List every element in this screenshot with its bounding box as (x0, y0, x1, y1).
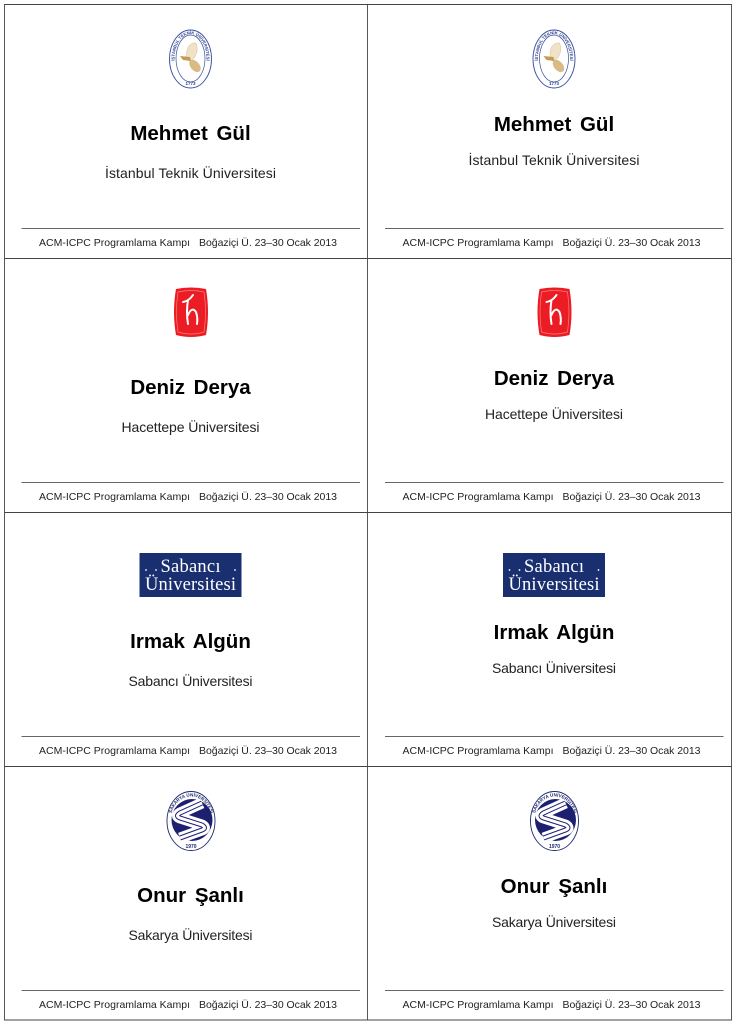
footer: Boğaziçi Ü. 23–30 Ocak 2013 (562, 745, 701, 757)
footer (22, 228, 360, 249)
footer (22, 990, 360, 1011)
footer: Boğaziçi Ü. 23–30 Ocak 2013 (562, 999, 701, 1011)
footer: ACM-ICPC Programlama Kampı (402, 999, 554, 1011)
card: Onur Şanlı, right (385, 791, 724, 1011)
logo: Sabancı Üniversitesi: Sabancı (160, 557, 220, 577)
name: Irmak Algün (130, 630, 251, 653)
footer (385, 482, 724, 503)
footer (385, 990, 724, 1011)
logo: Hacettepe Üniversitesi (538, 288, 572, 337)
footer: Boğaziçi Ü. 23–30 Ocak 2013 (199, 491, 337, 503)
card: Irmak Algün, right (385, 553, 724, 757)
logo: Sakarya Üniversitesi: SAKARYA ÜNİVERSİTESİ (168, 792, 214, 813)
footer: ACM-ICPC Programlama Kampı (39, 999, 190, 1011)
footer: ACM-ICPC Programlama Kampı (39, 745, 190, 757)
card: Deniz Derya, right (385, 288, 724, 503)
logo: İstanbul Teknik Üniversitesi (532, 30, 576, 88)
footer: ACM-ICPC Programlama Kampı (39, 237, 190, 249)
footer: ACM-ICPC Programlama Kampı (402, 491, 554, 503)
name: Deniz Derya (130, 376, 251, 399)
logo: Sabancı Üniversitesi: Üniversitesi (508, 574, 600, 595)
logo: İstanbul Teknik Üniversitesi (169, 30, 212, 88)
footer: ACM-ICPC Programlama Kampı (39, 491, 190, 503)
logo: Hacettepe Üniversitesi (174, 288, 208, 337)
card: Mehmet Gül, left (22, 30, 360, 249)
university: Sabancı Üniversitesi (492, 659, 616, 676)
card: Mehmet Gül, right (385, 30, 724, 249)
logo: İstanbul Teknik Üniversitesi: 1773 (185, 81, 196, 86)
university: Sakarya Üniversitesi (492, 913, 616, 930)
university: İstanbul Teknik Üniversitesi (468, 151, 640, 168)
footer: Boğaziçi Ü. 23–30 Ocak 2013 (199, 745, 337, 757)
logo: Sakarya Üniversitesi: 1970 (549, 844, 560, 850)
logo: Sakarya Üniversitesi: SAKARYA ÜNİVERSİTESİ (532, 792, 578, 813)
card: Deniz Derya, left (22, 288, 360, 503)
university: Sakarya Üniversitesi (128, 926, 252, 943)
name: Mehmet Gül (494, 113, 614, 136)
logo: Sabancı Üniversitesi (140, 553, 242, 597)
name: Irmak Algün (494, 621, 614, 644)
card: Irmak Algün, left (22, 553, 360, 757)
footer (385, 228, 724, 249)
footer (22, 736, 360, 757)
footer: Boğaziçi Ü. 23–30 Ocak 2013 (199, 237, 337, 249)
university: Hacettepe Üniversitesi (122, 418, 260, 435)
university: Hacettepe Üniversitesi (485, 405, 623, 422)
name: Onur Şanlı (501, 875, 607, 898)
logo: Sabancı Üniversitesi: Sabancı (524, 557, 584, 577)
logo: İstanbul Teknik Üniversitesi: İSTANBUL TEKNİK ÜNİVERSİTESİ (534, 30, 574, 60)
footer: ACM-ICPC Programlama Kampı (402, 237, 554, 249)
footer: ACM-ICPC Programlama Kampı (402, 745, 554, 757)
footer: Boğaziçi Ü. 23–30 Ocak 2013 (562, 237, 701, 249)
name: Mehmet Gül (130, 122, 251, 145)
footer: Boğaziçi Ü. 23–30 Ocak 2013 (562, 491, 701, 503)
logo: İstanbul Teknik Üniversitesi: İSTANBUL TEKNİK ÜNİVERSİTESİ (170, 30, 210, 60)
university: Sabancı Üniversitesi (128, 672, 252, 689)
logo: Sakarya Üniversitesi (166, 791, 216, 851)
card: Onur Şanlı, left (22, 791, 360, 1011)
name: Onur Şanlı (137, 884, 244, 907)
name: Deniz Derya (494, 367, 615, 390)
logo: Sakarya Üniversitesi (530, 791, 579, 851)
logo: Sabancı Üniversitesi: Üniversitesi (145, 574, 236, 595)
university: İstanbul Teknik Üniversitesi (105, 164, 276, 181)
footer (22, 482, 360, 503)
logo: Sabancı Üniversitesi (503, 553, 605, 597)
footer (385, 736, 724, 757)
logo: İstanbul Teknik Üniversitesi: 1773 (549, 81, 560, 86)
logo: Sakarya Üniversitesi: 1970 (185, 844, 197, 850)
footer: Boğaziçi Ü. 23–30 Ocak 2013 (199, 999, 337, 1011)
